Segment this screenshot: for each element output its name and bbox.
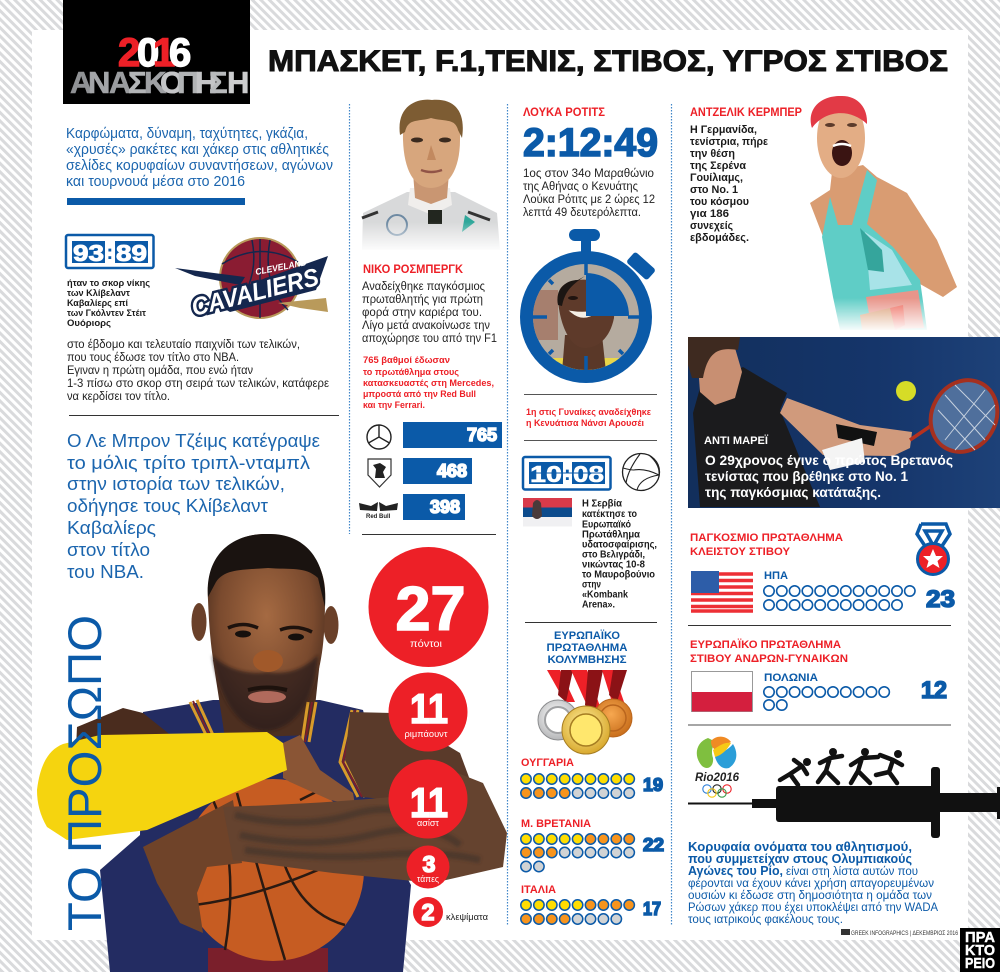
Cleveland Cavaliers logo [175, 238, 328, 322]
bar: Ferrari 468: 468 [437, 461, 467, 481]
flag: USA [691, 571, 753, 612]
Rosberg red note: το πρωτάθλημα στους [363, 367, 459, 378]
main title: ΜΠΑΣΚΕΤ, F.1,ΤΕΝΙΣ, ΣΤΙΒΟΣ, ΥΓΡΟΣ ΣΤΙΒΟΣ [268, 45, 948, 78]
swimming: Italy: ΙΤΑΛΙΑ [521, 884, 556, 896]
USA medal rings: ΗΠΑ [764, 570, 788, 582]
Cleveland Cavaliers logo: CAVALIERS [189, 263, 322, 322]
Rosberg paragraph: Λίγο μετά ανακοίνωσε την [362, 318, 490, 332]
LeBron quote [67, 431, 320, 582]
Serbia water polo text: Πρωτάθλημα [582, 530, 640, 540]
stat circle: 3 blocks [406, 846, 450, 888]
LeBron quote: Καβαλίερς [67, 518, 156, 538]
LeBron quote: οδήγησε τους Κλίβελαντ [67, 496, 268, 516]
stat circle: 3 blocks: τάπες [417, 874, 440, 884]
doping text: φέρονται να έχουν κάνει χρήση απαγορευμένων [688, 878, 934, 890]
intro text: σελίδες κορυφαίων συναντήσεων, αγώνων [66, 158, 333, 174]
Rotich paragraph: λεπτά 49 δευτερόλεπτα. [523, 207, 641, 219]
doping text: ουσιών κι έδωσε στη δημοσιότητα η ομάδα των [688, 890, 932, 902]
European athletics heading: ΣΤΙΒΟΥ ΑΝΔΡΩΝ-ΓΥΝΑΙΚΩΝ [690, 653, 848, 665]
stat circle: 11 assists: ασίστ [417, 818, 439, 829]
LeBron quote: το μόλις τρίτο τριπλ-νταμπλ [67, 453, 310, 473]
flag: Poland [692, 672, 752, 712]
Rotich paragraph: της Αθήνας ο Κενυάτης [523, 181, 638, 193]
icon: medal [917, 524, 950, 574]
stat circle: 2 steals: κλεψίματα [446, 912, 488, 923]
finals paragraph: στο έβδομο και τελευταίο παιχνίδι των τελικών, [67, 337, 300, 351]
LeBron quote: στον τίτλο [67, 540, 150, 560]
photo: LeBron James with basketball [37, 534, 507, 972]
indoor athletics heading: ΚΛΕΙΣΤΟΥ ΣΤΙΒΟΥ [690, 546, 791, 558]
swimming: Great Britain: Μ. ΒΡΕΤΑΝΙΑ [521, 818, 591, 830]
European athletics heading: ΕΥΡΩΠΑΪΚΟ ΠΡΩΤΑΘΛΗΜΑ [690, 638, 841, 651]
credit line: GREEK INFOGRAPHICS | ΔΕΚΕΜΒΡΙΟΣ 2016 [851, 931, 959, 937]
icon: Rio 2016 logo [695, 737, 739, 797]
bar: Red Bull 398 [403, 494, 465, 520]
photo: Nico Rosberg [360, 100, 502, 252]
photo panel: Andy Murray [688, 337, 1000, 508]
doping text: Ρώσων χάκερ που έχει υποκλέψει από την WADA [688, 902, 938, 914]
runner 1 [780, 758, 811, 785]
doping text [688, 840, 938, 926]
score caption [67, 278, 150, 328]
Kerber heading: ΑΝΤΖΕΛΙΚ ΚΕΡΜΠΕΡ [690, 107, 802, 119]
Rosberg red note: μπροστά από την Red Bull [363, 389, 476, 400]
USA medal rings: 23 [926, 586, 955, 613]
intro text: «χρυσές» ρακέτες και χάκερ στις αθλητικές [66, 142, 329, 158]
Serbia water polo text: Η Σερβία [582, 498, 622, 510]
Kerber text [690, 124, 769, 244]
stat circle: 11 rebounds [388, 672, 468, 752]
photo: Angelique Kerber [800, 96, 957, 332]
Poland medal rings: ΠΟΛΩΝΙΑ [764, 672, 818, 684]
doping text: τους ιατρικούς φακέλους τους. [688, 914, 843, 926]
icon: Red Bull [359, 502, 398, 520]
photo panel: Andy Murray: ΑΝΤΙ ΜΑΡΕΪ [704, 434, 769, 447]
icon: Ferrari [368, 459, 391, 487]
Kerber text: της Σερένα [690, 160, 746, 172]
Rotich paragraph [523, 168, 655, 219]
stopwatch with runner photo [520, 229, 656, 383]
icon: Mercedes [367, 425, 391, 449]
medals illustration [538, 670, 632, 754]
scoreboard 10:08: 10 [530, 461, 562, 487]
Kerber text: στο Νο. 1 [690, 184, 738, 196]
icon: syringe [688, 767, 1000, 838]
Praktoreio logo [960, 928, 1000, 972]
Serbia water polo text: Ευρωπαϊκό [582, 520, 631, 530]
bar: Ferrari 468 [403, 458, 472, 484]
finals paragraph [67, 337, 330, 403]
stat circle: 11 rebounds: 11 [410, 685, 448, 732]
Kerber text: Γουίλιαμς, [690, 172, 743, 184]
finals paragraph: να κερδίσει τον τίτλο. [67, 389, 170, 403]
header badge: 2016 review: 2016 [118, 31, 191, 75]
scoreboard 93:89 [66, 235, 154, 268]
European swimming heading: ΠΡΩΤΑΘΛΗΜΑ [546, 642, 628, 654]
women's winner note [526, 407, 651, 429]
European swimming heading [546, 629, 628, 666]
stat circle: 2 steals: 2 [422, 899, 434, 925]
swimming: Italy: 17 [643, 899, 661, 919]
icon: Red Bull: Red Bull [366, 514, 391, 520]
score caption: Καβαλίερς επί [67, 298, 129, 308]
intro text: Καρφώματα, δύναμη, ταχύτητες, γκάζια, [66, 126, 308, 142]
Kerber text: για 186 [690, 208, 729, 220]
scoreboard 93:89: 93 [73, 240, 104, 266]
intro text: και τουρνουά μέσα στο 2016 [66, 174, 245, 190]
USA medal rings [764, 570, 955, 613]
flag: Serbia [523, 498, 572, 526]
Rosberg red note: και την Ferrari. [363, 400, 425, 411]
icon: runners [780, 748, 902, 785]
score caption: Ουόριορς [67, 318, 111, 328]
finals paragraph: που τους έδωσε τον τίτλο στο ΝΒΑ. [67, 350, 239, 364]
icon: water polo ball [622, 454, 660, 490]
scoreboard 10:08: 08 [573, 461, 604, 487]
bar: Mercedes 765 [403, 422, 502, 448]
indoor athletics heading: ΠΑΓΚΟΣΜΙΟ ΠΡΩΤΑΘΛΗΜΑ [690, 532, 843, 544]
Rosberg paragraph: Αναδείχθηκε παγκόσμιος [362, 279, 485, 293]
Rotich paragraph: 1ος στον 34ο Μαραθώνιο [523, 168, 654, 180]
Rosberg paragraph: πρωταθλητής για πρώτη [362, 292, 483, 306]
icon: Rio 2016 logo: Rio2016 [695, 770, 739, 784]
Serbia water polo text: Arena». [582, 600, 615, 610]
stat circle: 27 points [368, 547, 488, 667]
intro underline bar [67, 198, 245, 205]
Kerber text: την θέση [690, 148, 735, 160]
LeBron quote: στην ιστορία των τελικών, [67, 474, 285, 494]
swimming: Great Britain: 22 [643, 835, 664, 855]
Rosberg red note: 765 βαθμοί έδωσαν [363, 355, 450, 366]
stat circle: 2 steals [413, 897, 488, 927]
doping text: Κορυφαία ονόματα του αθλητισμού, [688, 840, 912, 854]
credit line [841, 929, 959, 937]
swimming: Hungary: 19 [643, 775, 663, 795]
Kerber text: Η Γερμανίδα, [690, 124, 757, 136]
European swimming heading: ΚΟΛΥΜΒΗΣΗΣ [548, 654, 627, 666]
header badge: 2016 review: ΑΝΑΣΚΟΠΗΣΗ [70, 65, 249, 100]
score caption: των Κλίβελαντ [67, 288, 130, 298]
stat circle: 27 points: πόντοι [410, 638, 442, 650]
Praktoreio logo: ΠΡΑ [965, 930, 996, 946]
Rosberg paragraph: φορά στην καριέρα του. [362, 305, 482, 319]
Serbia water polo text: στην [582, 580, 601, 590]
Kerber text: του κόσμου [690, 196, 749, 208]
stat circle: 11 rebounds: ριμπάουντ [404, 729, 448, 740]
doping text: που συμμετείχαν στους Ολυμπιακούς [688, 852, 912, 866]
runner 3 [851, 748, 878, 783]
swimming: Hungary [521, 757, 663, 798]
Serbia water polo text: «Kombank [582, 590, 628, 600]
bar: Mercedes 765: 765 [467, 425, 497, 445]
Serbia water polo text: κατέκτησε το [582, 509, 637, 520]
Rotich paragraph: Λούκα Ρότιτς με 2 ώρες 12 [523, 194, 655, 206]
Rosberg paragraph [362, 279, 497, 345]
finals paragraph: 1-3 πίσω στο σκορ στη σειρά των τελικών, κατάφερε [67, 376, 330, 390]
Poland medal rings [764, 672, 947, 710]
scoreboard 93:89: : [106, 242, 113, 264]
constructors bar chart [359, 422, 502, 520]
finals paragraph: Εγιναν η πρώτη ομάδα, που ενώ ήταν [67, 363, 253, 377]
runner 2 [818, 748, 842, 783]
swimming: Great Britain [521, 818, 664, 872]
score caption: των Γκόλντεν Στέιτ [67, 308, 146, 318]
bar: Red Bull 398: 398 [430, 497, 460, 517]
Rosberg name: ΝΙΚΟ ΡΟΣΜΠΕΡΓΚ [363, 264, 464, 276]
Poland medal rings: 12 [921, 677, 947, 704]
Praktoreio logo: ΡΕΙΟ [965, 956, 995, 972]
vertical heading: the person: ΤΟ ΠΡΟΣΩΠΟ [58, 615, 111, 931]
Rosberg red note [363, 355, 494, 411]
swimming: Italy [521, 884, 661, 924]
Kerber text: συνεχείς [690, 220, 733, 232]
indoor athletics heading [690, 532, 843, 558]
header badge: 2016 review [63, 0, 250, 104]
European athletics heading [690, 638, 848, 665]
swimming: Hungary: ΟΥΓΓΑΡΙΑ [521, 757, 574, 769]
Kerber text: εβδομάδες. [690, 232, 749, 244]
Kerber text: τενίστρια, πήρε [690, 136, 769, 148]
doping text: είναι στη λίστα αυτών που [786, 866, 918, 878]
LeBron quote: Ο Λε Μπρον Τζέιμς κατέγραψε [67, 431, 320, 451]
marathon time: 2:12:49 [523, 121, 658, 165]
intro text [66, 126, 333, 190]
Cleveland Cavaliers logo: CLEVELAND [254, 257, 308, 277]
Serbia water polo text: νικώντας 10-8 [582, 560, 646, 570]
doping text: Αγώνες του Ρίο, [688, 864, 783, 878]
Serbia water polo text: το Μαυροβούνιο [582, 570, 655, 580]
Rosberg paragraph: αποχώρησε του από την F1 [362, 331, 497, 345]
Praktoreio logo: ΚΤΟ [965, 943, 995, 959]
stat circle: 11 assists: 11 [410, 779, 448, 826]
Rosberg red note: κατασκευαστές στη Mercedes, [363, 378, 494, 389]
stat circle: 27 points: 27 [396, 575, 466, 644]
Serbia water polo text: στο Βελιγράδι, [582, 550, 645, 560]
scoreboard 10:08: : [564, 463, 571, 485]
European swimming heading: ΕΥΡΩΠΑΪΚΟ [554, 629, 620, 642]
photo panel: Andy Murray: Ο 29χρονος έγινε ο πρώτος Βρετανός [705, 453, 953, 468]
runner 4 [876, 750, 902, 783]
stat circle: 3 blocks: 3 [423, 851, 435, 877]
women's winner note: 1η στις Γυναίκες αναδείχθηκε [526, 407, 651, 418]
photo panel: Andy Murray: τενίστας που βρέθηκε στο Νο. 1 [705, 469, 908, 484]
scoreboard 10:08 [523, 457, 610, 490]
score caption: ήταν το σκορ νίκης [67, 278, 150, 288]
photo panel: Andy Murray: της παγκόσμιας κατάταξης. [705, 485, 881, 500]
LeBron quote: του ΝΒΑ. [67, 562, 144, 582]
Serbia water polo text [582, 498, 657, 610]
women's winner note: η Κενυάτισα Νάνσι Αρουσέι [526, 418, 644, 429]
Rotich heading: ΛΟΥΚΑ ΡΟΤΙΤΣ [523, 107, 605, 119]
stat circle: 11 assists [388, 760, 468, 838]
scoreboard 93:89: 89 [116, 240, 147, 266]
Serbia water polo text: υδατοσφαίρισης, [582, 540, 657, 550]
